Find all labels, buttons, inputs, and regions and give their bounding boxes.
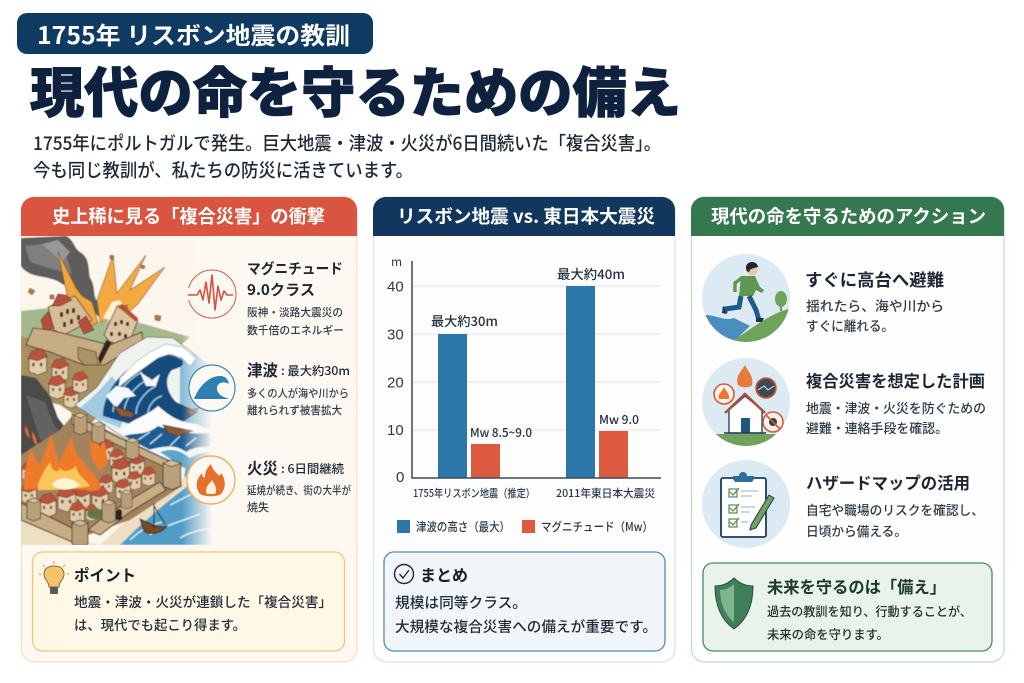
text: tsunami: : 最大約30m	[281, 362, 350, 379]
text: fire: 延焼が続き、街の大半が	[247, 482, 351, 498]
icon: shield	[715, 578, 753, 629]
panel: comparison chart	[373, 197, 675, 662]
text: evacuate: すぐに高台へ避難	[805, 266, 944, 291]
panel heading: comparison: リスボン地震 vs. 東日本大震災	[397, 203, 655, 229]
category labels: 2011年東日本大震災	[556, 485, 655, 501]
value labels	[431, 264, 639, 441]
callout: preparedness: 未来の命を守ります。	[767, 624, 889, 643]
bars: 2011 Tohoku	[566, 286, 628, 478]
axis labels: 0	[396, 469, 404, 486]
text: magnitude: マグニチュード	[247, 258, 343, 279]
axis labels: m	[391, 253, 402, 270]
icon: light bulb	[39, 561, 69, 594]
icon: seismic wave	[186, 270, 236, 318]
icon: house and hazards	[702, 358, 790, 446]
icon: tsunami wave	[189, 365, 235, 411]
panel heading: comparison	[373, 197, 675, 236]
legend	[397, 518, 653, 535]
text: magnitude: 阪神・淡路大震災の	[247, 304, 343, 320]
axis labels	[387, 253, 404, 486]
callout: point	[32, 552, 344, 651]
text: hazard map: ハザードマップの活用	[806, 470, 970, 494]
panel heading: actions	[691, 197, 1004, 236]
legend: 津波の高さ（最大）	[416, 518, 510, 535]
callout: summary: 規模は同等クラス。	[395, 592, 527, 613]
text: hazard map	[806, 470, 984, 540]
icon: running to high ground	[700, 254, 792, 345]
axis labels: 40	[387, 278, 404, 296]
value labels: Mw 8.5~9.0	[470, 424, 532, 441]
callout: point: ポイント	[74, 562, 136, 586]
value labels: 最大約30m	[431, 311, 498, 330]
callout: summary	[384, 552, 665, 651]
text: fire	[247, 455, 351, 515]
panel: impact of compound disaster	[21, 197, 357, 662]
category labels	[413, 485, 655, 501]
bars: 1755 Lisbon	[438, 334, 500, 478]
header badge: 1755年 リスボン地震の教訓	[37, 16, 350, 51]
intro text	[33, 130, 661, 183]
callout: point: は、現代でも起こり得ます。	[74, 614, 246, 634]
text: evacuate: すぐに離れる。	[806, 315, 894, 335]
value labels: 最大約40m	[557, 264, 625, 283]
callout: summary: まとめ	[420, 562, 468, 586]
text: hazard map: 日頃から備える。	[806, 521, 907, 540]
callout: point: 地震・津波・火災が連鎖した「複合災害」	[74, 591, 332, 611]
intro text: 1755年にポルトガルで発生。巨大地震・津波・火災が6日間続いた「複合災害」。	[33, 130, 661, 156]
callout: preparedness	[703, 563, 992, 651]
illustration: earthquake, tsunami and fire in Lisbon	[21, 236, 216, 547]
text: magnitude: 数千倍のエネルギー	[247, 322, 344, 338]
callout: preparedness: 過去の教訓を知り、行動することが、	[767, 601, 972, 620]
axis labels: 10	[387, 422, 404, 439]
text: plan: 地震・津波・火災を防ぐための	[806, 398, 986, 417]
text: plan: 複合災害を想定した計画	[806, 368, 985, 392]
intro text: 今も同じ教訓が、私たちの防災に活きています。	[33, 157, 413, 183]
text: hazard map: 自宅や職場のリスクを確認し、	[806, 500, 984, 519]
text: fire: 焼失	[247, 499, 269, 515]
callout: summary: 大規模な複合災害への備えが重要です。	[395, 616, 657, 637]
category labels: 1755年リスボン地震（推定）	[413, 485, 535, 501]
text: tsunami: 離れられず被害拡大	[247, 402, 342, 418]
panel heading: impact	[21, 197, 357, 236]
text: tsunami: 津波	[247, 357, 278, 381]
panel heading: actions: 現代の命を守るためのアクション	[711, 203, 986, 229]
text: fire: 火災	[247, 455, 278, 479]
axis labels: 20	[387, 374, 404, 392]
text: plan: 避難・連絡手段を確認。	[806, 418, 948, 437]
text: plan	[806, 368, 986, 437]
bar chart: tsunami height and magnitude	[387, 253, 661, 535]
text: tsunami: 多くの人が海や川から	[247, 385, 349, 401]
panel: actions	[691, 197, 1004, 662]
icon: hazard map clipboard	[702, 460, 790, 548]
text: evacuate	[805, 266, 944, 335]
icon: fire	[187, 456, 235, 504]
text: magnitude: 9.0クラス	[247, 279, 315, 300]
axis labels: 30	[387, 326, 404, 344]
panel heading: impact: 史上稀に見る「複合災害」の衝撃	[52, 203, 325, 229]
text: magnitude	[247, 258, 344, 338]
main title: 現代の命を守るための備え	[30, 49, 681, 128]
text: fire: : 6日間継続	[281, 460, 344, 477]
text: tsunami	[247, 357, 350, 418]
callout: preparedness: 未来を守るのは「備え」	[767, 574, 946, 598]
icon: check mark	[394, 564, 414, 584]
value labels: Mw 9.0	[599, 411, 639, 428]
legend: マグニチュード（Mw）	[541, 518, 653, 535]
text: evacuate: 揺れたら、海や川から	[806, 295, 944, 315]
